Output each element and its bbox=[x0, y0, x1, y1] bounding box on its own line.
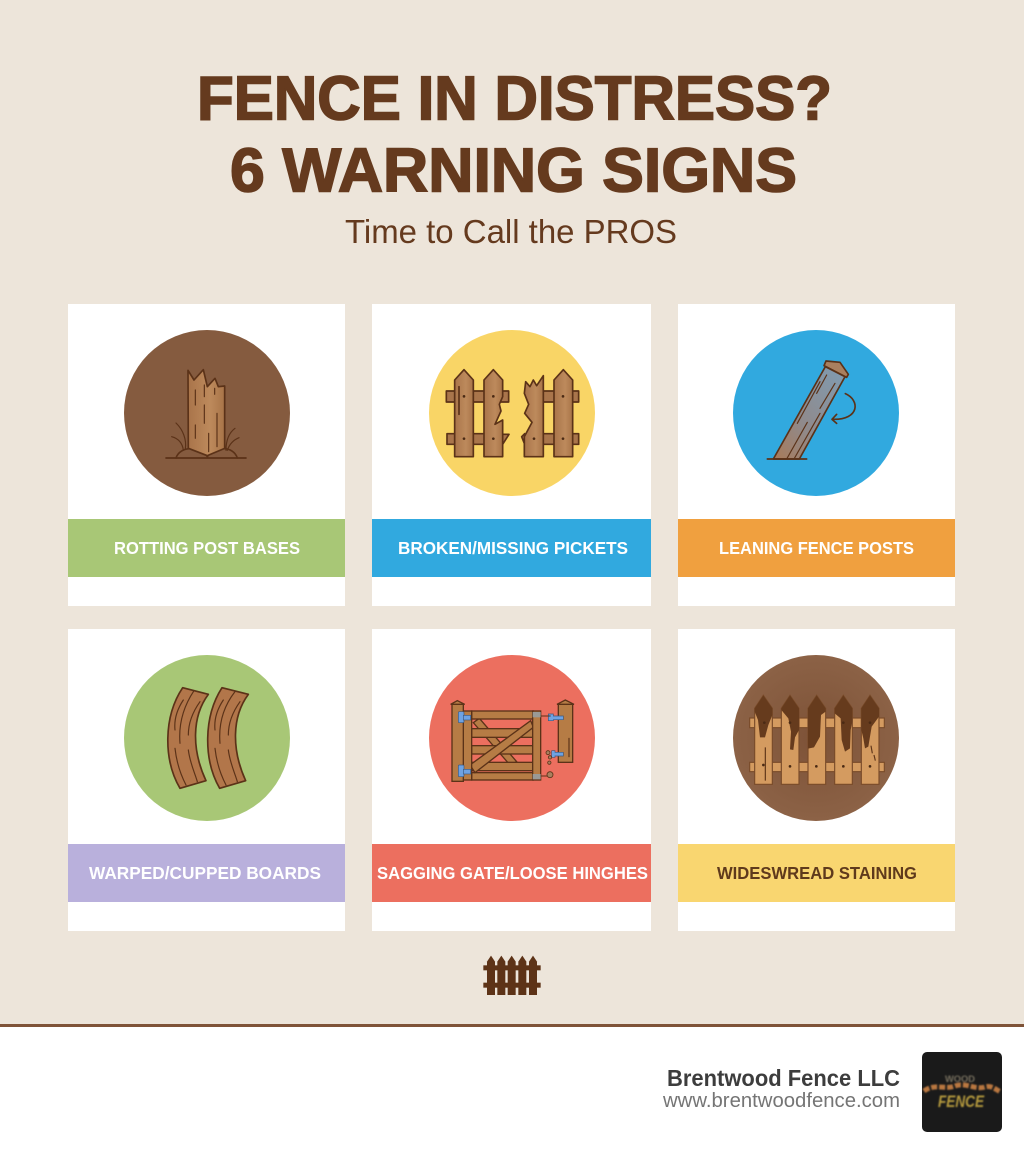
logo: FENCE bbox=[938, 1092, 985, 1111]
label band: ROTTING POST BASES bbox=[114, 538, 300, 558]
icon: stained fence bbox=[733, 655, 899, 821]
label band bbox=[372, 519, 651, 577]
company name: Brentwood Fence LLC bbox=[667, 1065, 900, 1091]
footer bbox=[0, 1024, 1024, 1154]
icon: leaning post bbox=[733, 330, 899, 496]
icon: warped boards bbox=[124, 655, 290, 821]
label band bbox=[678, 844, 955, 902]
icon: rotting post bbox=[124, 330, 290, 496]
logo: WOOD bbox=[945, 1074, 976, 1084]
label band bbox=[68, 844, 345, 902]
icon: small fence divider bbox=[483, 956, 541, 995]
panel: warped boards bbox=[68, 629, 345, 931]
label band bbox=[678, 519, 955, 577]
icon: sagging gate bbox=[429, 655, 595, 821]
title: 6 WARNING SIGNS bbox=[230, 136, 797, 206]
title: FENCE IN DISTRESS? bbox=[197, 64, 832, 134]
panel: broken or missing pickets bbox=[372, 304, 651, 606]
panel: widespread staining bbox=[678, 629, 955, 931]
panel: sagging gate bbox=[372, 629, 651, 931]
panel: rotting post bases bbox=[68, 304, 345, 606]
subtitle: Time to Call the PROS bbox=[345, 213, 677, 250]
website: www.brentwoodfence.com bbox=[662, 1090, 900, 1112]
label band bbox=[372, 844, 651, 902]
label band: LEANING FENCE POSTS bbox=[719, 538, 914, 558]
icon: broken pickets bbox=[429, 330, 595, 496]
label band: BROKEN/MISSING PICKETS bbox=[398, 538, 628, 558]
label band: WARPED/CUPPED BOARDS bbox=[89, 863, 321, 883]
panel: leaning fence posts bbox=[678, 304, 955, 606]
label band bbox=[68, 519, 345, 577]
label band: SAGGING GATE/LOOSE HINGHES bbox=[377, 863, 648, 883]
logo bbox=[922, 1052, 1002, 1132]
label band: WIDESWREAD STAINING bbox=[717, 863, 917, 883]
title bbox=[197, 64, 832, 206]
